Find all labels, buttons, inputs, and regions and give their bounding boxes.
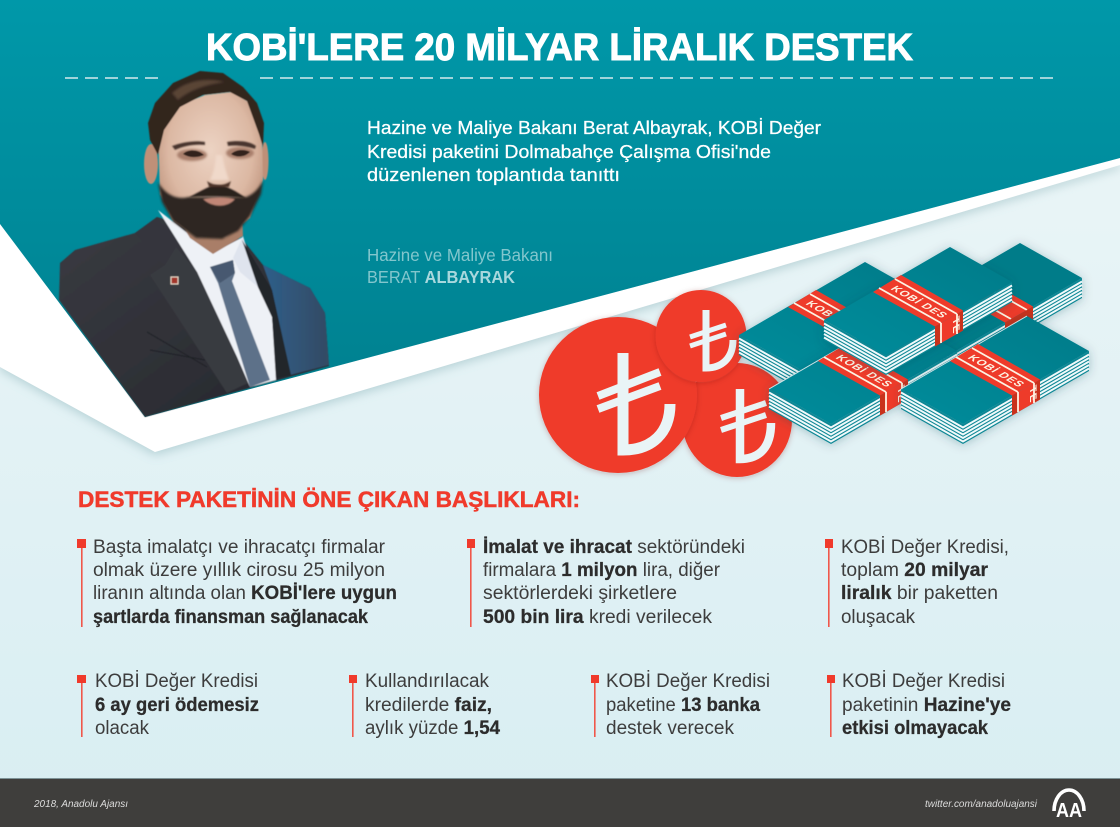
tie (210, 260, 270, 387)
item: grace period: 6 ay geri ödemesiz (95, 695, 259, 716)
right jacket panel (263, 265, 329, 375)
white diagonal band (0, 158, 1120, 452)
intro text (367, 118, 821, 185)
item: treasury impact: KOBİ Değer Kredisi (842, 671, 1005, 692)
face (158, 92, 263, 238)
item: package size: oluşacak (841, 607, 915, 628)
coin: lower lira (682, 363, 792, 477)
item: treasury impact: paketinin Hazine'ye (842, 695, 1011, 716)
item: package size: liralık bir paketten (841, 583, 998, 604)
suit body (59, 217, 329, 417)
item: credit limits (467, 537, 745, 628)
item: finance conditions: şartlarda finansman sağlanacak (93, 607, 368, 628)
lira sign on lower coin (721, 389, 771, 459)
item: credit limits: firmalara 1 milyon lira, diğer (483, 560, 721, 581)
item: package size: toplam 20 milyar (841, 560, 989, 581)
portrait of the minister (59, 71, 329, 417)
section heading: DESTEK PAKETİNİN ÖNE ÇIKAN BAŞLIKLARI: (78, 487, 580, 512)
money stack: back right: ES (985, 295, 1010, 310)
coin: small lira (656, 290, 746, 382)
money stack: back left (739, 262, 927, 390)
footer bar (0, 778, 1120, 827)
pocket seam (147, 332, 207, 367)
left brow (172, 141, 205, 150)
shirt (158, 210, 276, 387)
neck (170, 205, 243, 254)
item: treasury impact (827, 671, 1011, 739)
money stack: front left: KOBİ DES (832, 353, 896, 389)
money stack: top centre (824, 247, 1012, 375)
money stack: back left: KOBİ (802, 299, 841, 321)
item: grace period (77, 671, 259, 739)
money stack: top centre: KOBİ DES (887, 284, 951, 320)
intro text: Hazine ve Maliye Bakanı Berat Albayrak, KOBİ Değer (367, 118, 821, 138)
collar lapel (135, 217, 176, 265)
money stack: front left: TE (895, 383, 906, 405)
minister name caption: BERAT ALBAYRAK (367, 267, 515, 287)
lower lapel (150, 247, 248, 393)
title: KOBİ'LERE 20 MİLYAR LİRALIK DESTEK (206, 27, 914, 69)
item: interest rate: kredilerde faiz, (365, 695, 492, 716)
copyright: 2018, Anadolu Ajansı (33, 799, 128, 810)
item: finance conditions: liranın altında olan KOBİ'lere uygun (93, 583, 397, 604)
dark right lapel (242, 240, 291, 378)
item: supporting banks: destek verecek (606, 718, 734, 739)
money stack: front right: KOBİ DES (964, 353, 1028, 389)
item: treasury impact: etkisi olmayacak (842, 718, 988, 739)
money stack: front right: TE (1027, 383, 1038, 405)
money stack: front right (901, 316, 1089, 444)
right ear (262, 142, 268, 180)
nose shadow (207, 181, 231, 187)
shirt collar right (233, 236, 258, 287)
lapel pin (171, 277, 178, 284)
item: supporting banks: KOBİ Değer Kredisi (606, 671, 770, 692)
coin: main lira (539, 317, 697, 473)
item: credit limits: sektörlerdeki şirketlere (483, 583, 677, 604)
item: finance conditions: Başta imalatçı ve ihracatçı firmalar (93, 537, 386, 558)
item: package size: KOBİ Değer Kredisi, (841, 537, 1009, 558)
left ear (144, 144, 158, 184)
teal header panel (0, 0, 1120, 417)
item: grace period: olacak (95, 718, 149, 739)
item: supporting banks: paketine 13 banka (606, 695, 760, 716)
item: credit limits: İmalat ve ihracat sektöründeki (483, 537, 745, 558)
right brow (227, 141, 256, 149)
money stack: top centre: TE (950, 314, 961, 336)
item: interest rate: Kullandırılacak (365, 671, 489, 692)
item: package size (825, 537, 1009, 628)
item: credit limits: 500 bin lira kredi verilecek (483, 607, 712, 628)
minister name caption: Hazine ve Maliye Bakanı (367, 245, 553, 265)
nose highlight (210, 155, 229, 180)
dashed rule under title (65, 77, 1057, 79)
item: finance conditions (77, 537, 397, 628)
item: grace period: KOBİ Değer Kredisi (95, 671, 258, 692)
item: interest rate: aylık yüzde 1,54 (365, 718, 500, 739)
lips (203, 198, 235, 206)
tie knot (210, 260, 235, 283)
minister name caption (367, 245, 553, 287)
left eye socket (177, 149, 207, 161)
twitter address: twitter.com/anadoluajansi (925, 799, 1038, 810)
item: interest rate (349, 671, 500, 739)
icon: Anadolu Agency logo: AA (1056, 800, 1082, 822)
right eye (231, 150, 250, 156)
lira sign on main coin (598, 353, 670, 450)
hair (148, 71, 264, 155)
item: supporting banks (591, 671, 770, 739)
item: finance conditions: olmak üzere yıllık cirosu 25 milyon (93, 560, 385, 581)
left eye (183, 150, 204, 157)
moustache (189, 185, 246, 198)
hair highlight (172, 80, 224, 100)
lira sign on small coin (690, 310, 733, 368)
icon: Anadolu Agency logo (1054, 790, 1084, 822)
beard (158, 180, 263, 239)
intro text: Kredisi paketini Dolmabahçe Çalışma Ofisi'nde (367, 142, 771, 162)
money stack: front left (769, 316, 957, 444)
right eye socket (226, 147, 254, 159)
intro text: düzenlenen toplantıda tanıttı (367, 165, 620, 185)
money stack: back right (894, 243, 1082, 371)
